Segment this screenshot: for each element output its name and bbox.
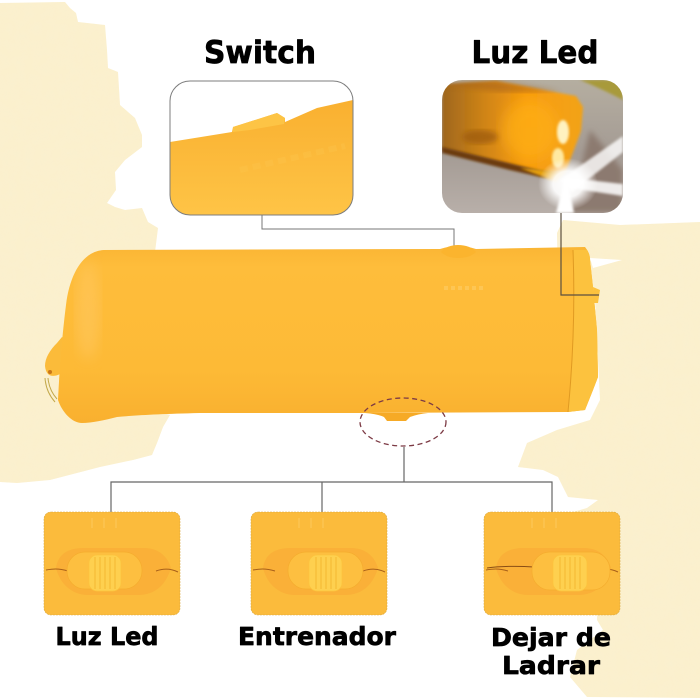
panel: LED light photo (442, 80, 623, 213)
panel: slider position Luz Led (44, 512, 180, 615)
connector: LED photo to device (561, 213, 599, 295)
label: Dejar de Ladrar: Ladrar (502, 651, 601, 680)
label: Dejar de Ladrar (491, 623, 611, 680)
heading: Switch: Switch (204, 35, 316, 71)
device: orange dog trainer (45, 245, 600, 423)
background: right paper wash (518, 220, 700, 698)
label: Luz Led: Luz Led (56, 622, 158, 651)
label: Entrenador: Entrenador (238, 622, 397, 651)
highlight: dashed oval around slider (360, 398, 446, 446)
background: left paper wash (0, 2, 170, 483)
panel: slider position Dejar de Ladrar (484, 512, 620, 615)
label: Dejar de Ladrar: Dejar de (491, 623, 611, 652)
background: white notch right (590, 258, 622, 268)
wrist strap (45, 337, 66, 402)
connector tree: slider to three positions (111, 447, 552, 512)
panel: switch close-up (170, 81, 353, 215)
connector: switch panel to device (262, 215, 454, 248)
heading: Luz Led: Luz Led (472, 35, 598, 71)
panel: slider position Entrenador (251, 512, 387, 615)
